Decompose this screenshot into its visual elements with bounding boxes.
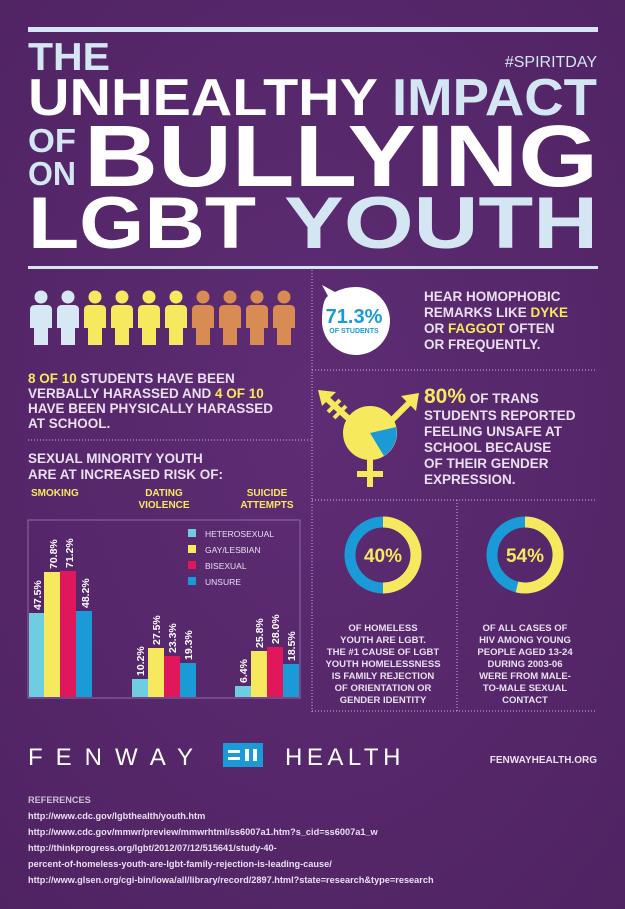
text: homeless: THE #1 CAUSE OF LGBT — [327, 647, 439, 658]
bar chart: 25.8% — [254, 618, 266, 648]
bar chart: 23.3% — [167, 623, 179, 653]
category labels: ATTEMPTS — [240, 500, 294, 511]
legend: GAY/LESBIAN — [205, 545, 261, 555]
heading: risk: SEXUAL MINORITY YOUTH — [28, 451, 203, 466]
references — [28, 795, 434, 885]
legend — [188, 529, 274, 587]
text: homophobic remarks: REMARKS LIKE DYKE — [424, 305, 568, 320]
title — [28, 36, 598, 264]
title: #SPIRITDAY — [505, 54, 597, 71]
text: HIV: PEOPLE AGED 13-24 — [477, 647, 573, 658]
text: HIV: WERE FROM MALE- — [479, 671, 571, 682]
callout: 71.3% bubble: 71.3% — [326, 306, 383, 328]
text: homophobic remarks — [424, 289, 568, 352]
callout: 71.3% bubble: OF STUDENTS — [329, 328, 379, 335]
text: homeless: IS FAMILY REJECTION — [332, 671, 434, 682]
text: HIV: HIV AMONG YOUNG — [479, 635, 571, 646]
bar chart: 28.0% — [270, 614, 282, 644]
references: http://www.cdc.gov/lgbthealth/youth.htm — [28, 811, 205, 821]
text: harassment stat: HAVE BEEN PHYSICALLY HARASSED — [28, 401, 273, 416]
text: homeless: GENDER IDENTITY — [340, 695, 427, 706]
title: YOUTH — [284, 183, 598, 264]
text: homeless: YOUTH ARE LGBT. — [340, 635, 426, 646]
logo: Fenway Health — [28, 743, 597, 771]
text: trans stat: OF THEIR GENDER — [424, 456, 549, 471]
category labels: DATING — [145, 488, 183, 499]
category labels — [31, 488, 294, 511]
text: homeless: YOUTH HOMELESSNESS — [325, 659, 441, 670]
text: harassment stat: VERBALLY HARASSED AND 4 OF 10 — [28, 386, 264, 401]
bar chart: 6.4% — [238, 658, 250, 683]
donut: 40%: 40% — [364, 546, 402, 567]
title: UNHEALTHY — [28, 69, 378, 127]
bar chart: 47.5% — [32, 580, 44, 610]
text: harassment stat — [28, 371, 273, 431]
text: trans stat: EXPRESSION. — [424, 472, 516, 487]
title: LGBT — [28, 183, 256, 264]
icon: people row — [30, 290, 295, 345]
text: trans stat: 80% OF TRANS — [424, 385, 539, 408]
references: http://thinkprogress.org/lgbt/2012/07/12/515641/study-40- — [28, 843, 277, 853]
title: BULLYING — [84, 108, 598, 205]
text: HIV — [477, 623, 573, 706]
legend: BISEXUAL — [205, 561, 247, 571]
logo: Fenway Health: FENWAYHEALTH.ORG — [490, 755, 597, 766]
text: homeless: OF ORIENTATION OR — [335, 683, 432, 694]
bar chart: 19.3% — [183, 630, 195, 660]
text: HIV: OF ALL CASES OF — [483, 623, 568, 634]
logo: Fenway Health: HEALTH — [285, 744, 405, 771]
callout: 71.3% bubble — [322, 285, 390, 355]
bar chart: 27.5% — [151, 615, 163, 645]
references: http://www.glsen.org/cgi-bin/iowa/all/library/record/2897.html?state=research&type=research — [28, 875, 434, 885]
title: THE — [28, 36, 110, 79]
references: http://www.cdc.gov/mmwr/preview/mmwrhtml/ss6007a1.htm?s_cid=ss6007a1_w — [28, 827, 379, 837]
text: trans stat: FEELING UNSAFE AT — [424, 424, 563, 439]
title: OF — [28, 122, 76, 159]
text: homophobic remarks: OR FAGGOT OFTEN — [424, 321, 555, 336]
text: harassment stat: 8 OF 10 STUDENTS HAVE BEEN — [28, 371, 235, 386]
category labels: SUICIDE — [247, 488, 288, 499]
text: homeless: OF HOMELESS — [348, 623, 418, 634]
text: trans stat: SCHOOL BECAUSE — [424, 440, 551, 455]
text: HIV: CONTACT — [502, 695, 548, 706]
title: ON — [28, 155, 76, 192]
bar chart: 10.2% — [135, 646, 147, 676]
category labels: SMOKING — [31, 488, 79, 499]
bar chart: 71.2% — [64, 538, 76, 568]
donut: 54% — [492, 522, 558, 588]
text: HIV: TO-MALE SEXUAL — [483, 683, 567, 694]
legend: UNSURE — [205, 577, 241, 587]
bar chart — [28, 520, 300, 698]
references: percent-of-homeless-youth-are-lgbt-family-rejection-is-leading-cause/ — [28, 859, 332, 869]
text: trans stat — [424, 385, 576, 487]
text: harassment stat: AT SCHOOL. — [28, 416, 110, 431]
text: HIV: DURING 2003-06 — [488, 659, 562, 670]
logo: Fenway Health: FENWAY — [28, 744, 206, 771]
title: IMPACT — [392, 69, 597, 127]
text: homophobic remarks: HEAR HOMOPHOBIC — [424, 289, 561, 304]
text: homophobic remarks: OR FREQUENTLY. — [424, 337, 541, 352]
heading: risk — [28, 451, 223, 482]
references: REFERENCES — [28, 795, 91, 805]
legend: HETEROSEXUAL — [205, 529, 274, 539]
bar chart: 48.2% — [80, 578, 92, 608]
category labels: VIOLENCE — [138, 500, 190, 511]
heading: risk: ARE AT INCREASED RISK OF: — [28, 467, 223, 482]
donut: 40% — [350, 522, 416, 588]
text: trans stat: STUDENTS REPORTED — [424, 408, 576, 423]
bar chart: 70.8% — [48, 539, 60, 569]
donut: 54%: 54% — [506, 546, 544, 567]
text: homeless — [325, 623, 441, 706]
bar chart: 18.5% — [286, 631, 298, 661]
icon: transgender symbol — [318, 390, 419, 487]
